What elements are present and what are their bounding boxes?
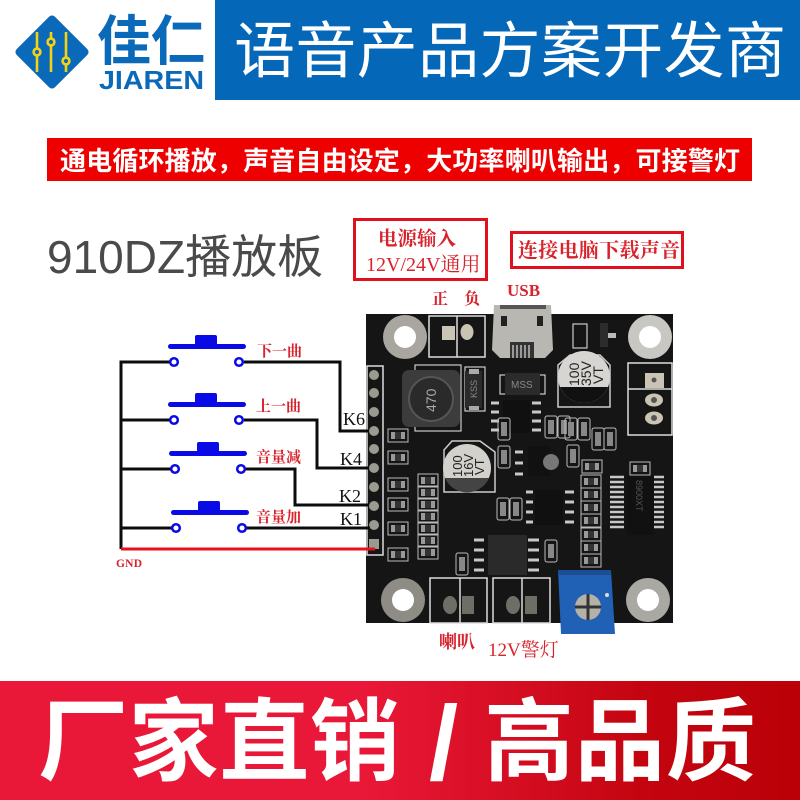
icon: diamond sliders <box>14 14 90 90</box>
red feature strip <box>47 138 752 181</box>
capacitor 100 35V <box>558 351 610 407</box>
ground and switch wires <box>121 362 370 549</box>
callout: power input: 12V/24V通用 <box>366 253 480 276</box>
diode MSS: MSS <box>511 380 533 391</box>
diode MSS <box>500 373 545 395</box>
blue potentiometer <box>558 570 615 634</box>
label: 12V warning light: 12V警灯 <box>488 639 559 661</box>
slogan: 高品质 <box>484 693 756 793</box>
header banner <box>215 0 800 100</box>
switch: volume up <box>171 501 249 532</box>
switch labels <box>256 343 302 526</box>
label: speaker: 喇叭 <box>439 632 475 652</box>
inductor 470: 470 <box>423 388 439 412</box>
small transistor top <box>573 323 616 348</box>
pin labels: K6 <box>343 409 365 429</box>
SMD components <box>388 416 650 575</box>
capacitor 100 35V: VT <box>590 366 606 384</box>
switch: previous track <box>168 393 246 424</box>
GND red wire <box>121 548 375 550</box>
USB connector <box>492 305 553 358</box>
diode SS <box>465 367 485 411</box>
label: positive negative: 负 <box>464 289 481 308</box>
callout: USB download: 连接电脑下载声音 <box>518 239 680 262</box>
IC chips: 8900XT <box>634 480 644 512</box>
label: GND: GND <box>116 558 142 570</box>
switch labels: 音量加 <box>256 509 301 526</box>
label: USB: USB <box>507 281 540 300</box>
label: positive negative <box>432 289 481 308</box>
capacitor 100 35V: 35V <box>578 360 594 386</box>
capacitor 100 16V: 16V <box>461 454 476 477</box>
circuit board <box>366 305 673 634</box>
pin labels: K1 <box>340 509 362 529</box>
product title: 910DZ播放板 <box>47 231 323 283</box>
feature text: 通电循环播放，声音自由设定，大功率喇叭输出，可接警灯 <box>60 146 740 176</box>
inductor 470 <box>402 365 461 431</box>
power terminal <box>429 316 485 357</box>
slogan: 厂家直销 <box>38 693 400 793</box>
label: positive negative: 正 <box>432 290 448 308</box>
wiring diagram <box>116 335 375 570</box>
header title: 语音产品方案开发商 <box>234 17 786 85</box>
capacitor 100 35V: 100 <box>566 362 582 386</box>
slogan: / <box>429 685 458 800</box>
speaker terminals <box>430 578 550 623</box>
capacitor 100 16V: 100 <box>450 455 465 477</box>
switch: next track <box>168 335 246 366</box>
logo <box>14 12 205 95</box>
callout: power input: 电源输入 <box>378 227 457 250</box>
pin labels <box>339 409 365 529</box>
right terminal <box>628 363 672 435</box>
slogan <box>38 685 756 800</box>
capacitor 100 16V: VT <box>472 458 487 475</box>
capacitor 100 16V <box>443 441 495 492</box>
logo latin name: JIAREN <box>99 65 204 95</box>
diode SS: KSS <box>469 380 479 398</box>
logo name: 佳仁 <box>97 12 205 72</box>
pin header <box>367 366 383 555</box>
switch labels: 上一曲 <box>256 398 301 415</box>
switches <box>168 335 249 532</box>
switch labels: 下一曲 <box>257 343 302 360</box>
pin labels: K2 <box>339 486 361 506</box>
switch labels: 音量减 <box>256 448 301 466</box>
callout: power input <box>354 220 486 280</box>
IC chips <box>474 400 664 575</box>
bottom banner <box>0 681 800 800</box>
pin labels: K4 <box>340 449 362 469</box>
mounting holes <box>381 315 672 622</box>
callout: USB download <box>512 232 682 268</box>
switch: volume down <box>169 442 247 473</box>
